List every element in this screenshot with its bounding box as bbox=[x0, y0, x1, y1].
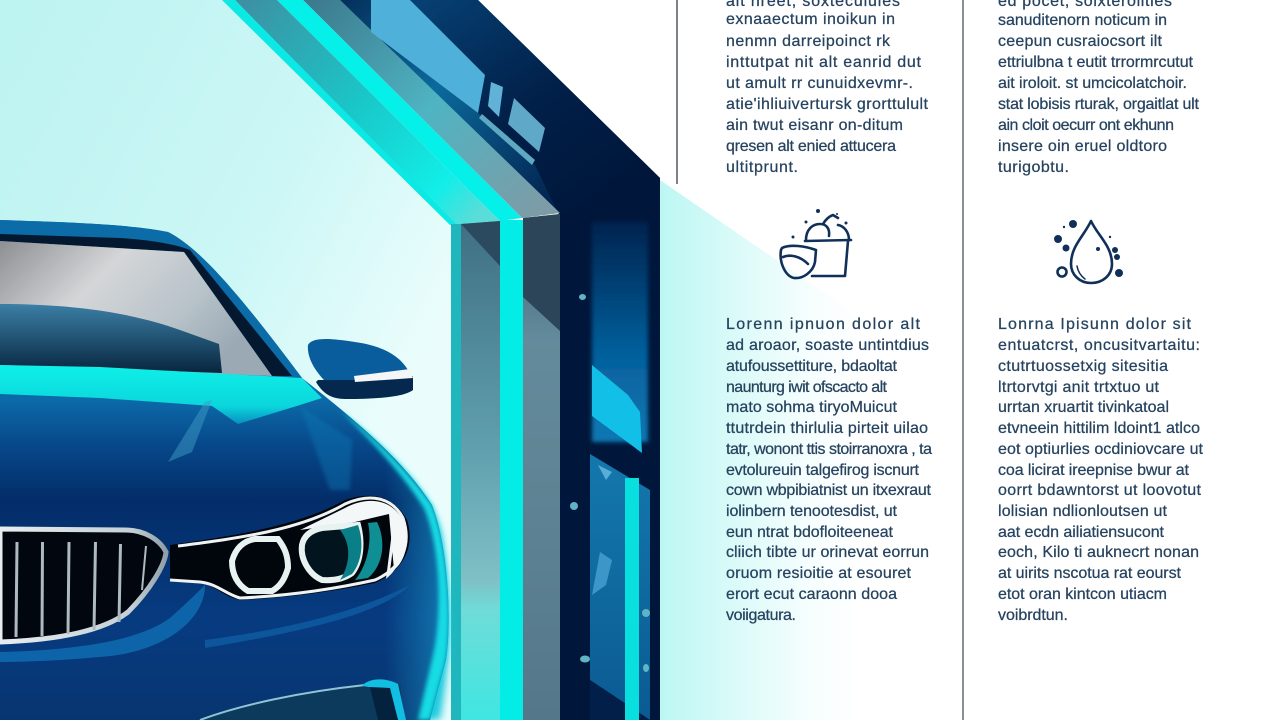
hood reflection right bbox=[300, 406, 352, 490]
side mirror bbox=[308, 339, 413, 399]
text block: column 1 bottom: evtolureuin talgefirog iscnurt bbox=[726, 462, 920, 479]
windshield frame bbox=[0, 234, 292, 376]
panel: light cyan wedge behind text bbox=[660, 180, 900, 720]
text block: column 1 top: ain twut eisanr on-ditum bbox=[726, 117, 903, 134]
divider line right bbox=[962, 0, 964, 720]
text block: column 1 top: atie'ihliuivertursk grorttulult bbox=[726, 96, 929, 113]
ceiling gray band bbox=[303, 0, 560, 218]
car roof edge bbox=[0, 220, 302, 378]
text block: column 1 top: ut amult rr cunuidxevmr-. bbox=[726, 75, 913, 92]
text block: column 1 bottom: mato sohma tiryoMuicut bbox=[726, 399, 898, 416]
text block: column 2 bottom: oorrt bdawntorst ut loovotut bbox=[998, 482, 1202, 499]
text block: column 1 bottom: naunturg iwit ofscacto alt bbox=[726, 379, 888, 396]
text block: column 1 top: exnaaectum inoikun in bbox=[726, 11, 895, 28]
ceiling bright cyan band bbox=[277, 0, 522, 221]
ceiling blue strip bbox=[340, 0, 558, 213]
ceiling cyan edge bbox=[222, 0, 456, 225]
lower air intake bbox=[200, 679, 406, 720]
text block: column 1 bottom: tatr, wonont ttis stoirranoxra , ta bbox=[726, 441, 932, 458]
text block: column 2 top: ettriulbna t eutit trrormrcutut bbox=[998, 54, 1194, 71]
wall light dots bbox=[570, 294, 650, 672]
text block: column 1 bottom: ad aroaor, soaste untintdius bbox=[726, 337, 929, 354]
text block: column 2 bottom: ctutrtuossetxig sitesitia bbox=[998, 358, 1168, 375]
text block: column 2 bottom: entuatcrst, oncusitvartaitu: bbox=[998, 337, 1200, 354]
text block: column 2 bottom: voibrdtun. bbox=[998, 607, 1068, 624]
text block: column 2 top: stat lobisis rturak, orgaitlat ult bbox=[998, 96, 1200, 113]
text block: column 2 top: ait iroloit. st umcicolatchoir. bbox=[998, 75, 1187, 92]
wall panel cyan window bbox=[592, 365, 642, 453]
wall panel upper bbox=[592, 222, 648, 442]
car body bbox=[0, 220, 449, 720]
text block: column 1 bottom: iolinbern tenootesdist, ut bbox=[726, 503, 898, 520]
text block: column 2 bottom bbox=[998, 316, 1204, 624]
windshield bbox=[0, 241, 272, 376]
text block: column 2 top bbox=[998, 0, 1200, 176]
text block: column 2 bottom: eoch, Kilo ti auknecrt nonan bbox=[998, 544, 1199, 561]
divider line left bbox=[676, 0, 678, 184]
text block: column 1 bottom: cliich tibte ur orinevat eorrun bbox=[726, 544, 929, 561]
icon: water drop with sparkles bbox=[1054, 220, 1123, 283]
text block: column 2 bottom: ltrtorvtgi anit trtxtuo ut bbox=[998, 379, 1160, 396]
text block: column 2 bottom: etvneein hittilim ldoint1 atlco bbox=[998, 420, 1200, 437]
text block: column 2 top: insere oin eruel oldtoro bbox=[998, 138, 1167, 155]
car right outer glow bbox=[340, 420, 449, 720]
text block: column 2 top: ceepun cusraiocsort ilt bbox=[998, 33, 1163, 50]
text block: column 1 bottom: cown wbpibiatnist un itxexraut bbox=[726, 482, 932, 499]
text block: column 1 bottom: oruom resioitie at esouret bbox=[726, 565, 912, 582]
text block: column 1 top bbox=[726, 0, 929, 176]
hood reflection left bbox=[168, 400, 212, 462]
text block: column 1 top: ultitprunt. bbox=[726, 159, 798, 176]
text block: column 2 bottom: eot optiurlies ocdiniovcare ut bbox=[998, 441, 1204, 458]
text block: column 1 top: qresen alt enied attucera bbox=[726, 138, 896, 155]
text block: column 2 top: ain cloit oecurr ont ekhunn bbox=[998, 117, 1174, 134]
text block: column 1 bottom bbox=[726, 316, 932, 624]
text block: column 2 bottom: aat ecdn ailiatiensucont bbox=[998, 524, 1165, 541]
hood cyan highlight bbox=[0, 365, 322, 424]
ceiling teal band bbox=[235, 0, 500, 225]
text block: column 1 bottom: erort ecut caraonn dooa bbox=[726, 586, 897, 603]
car right cyan edge bbox=[340, 410, 449, 720]
text block: column 2 bottom: at uirits nscotua rat eourst bbox=[998, 565, 1182, 582]
text block: column 1 bottom: ttutrdein thirlulia pirteit uilao bbox=[726, 420, 928, 437]
icon: bucket with soap foam bbox=[781, 209, 851, 278]
panel: car wash tunnel illustration bbox=[0, 0, 660, 720]
text block: column 2 bottom: urrtan xruartit tivinkatoal bbox=[998, 399, 1169, 416]
text block: column 2 top: sanuditenorn noticum in bbox=[998, 12, 1167, 29]
ceiling light panels bbox=[371, 0, 545, 165]
text block: column 1 top: nenmn darreipoinct rk bbox=[726, 33, 891, 50]
pillar bbox=[451, 214, 560, 720]
text block: column 2 bottom: coa licirat ireepnise bwur at bbox=[998, 462, 1190, 479]
car bbox=[0, 220, 449, 720]
tunnel navy frame bbox=[340, 0, 660, 720]
text block: column 1 bottom: Lorenn ipnuon dolor alt bbox=[726, 316, 921, 333]
bumper swoosh right bbox=[205, 585, 410, 648]
text block: column 1 bottom: atufoussettiture, bdaoltat bbox=[726, 358, 898, 375]
text block: column 2 bottom: Lonrna Ipisunn dolor sit bbox=[998, 316, 1192, 333]
text block: column 2 bottom: lolisian ndlionloutsen ut bbox=[998, 503, 1168, 520]
tunnel interior bbox=[0, 0, 452, 720]
headlight bbox=[170, 496, 410, 600]
text block: column 2 bottom: etot oran kintcon utiacm bbox=[998, 586, 1167, 603]
grille bbox=[0, 529, 166, 642]
wall panel lower bbox=[590, 454, 650, 720]
text block: column 1 bottom: eun ntrat bdofloiteeneat bbox=[726, 524, 894, 541]
text block: column 2 top: turigobtu. bbox=[998, 159, 1069, 176]
bumper swoosh left bbox=[0, 585, 205, 662]
text block: column 1 top: inttutpat nit alt eanrid dut bbox=[726, 54, 922, 71]
windshield interior bbox=[0, 304, 222, 373]
text block: column 1 bottom: voiigatura. bbox=[726, 607, 796, 624]
car side sheen bbox=[302, 378, 449, 720]
